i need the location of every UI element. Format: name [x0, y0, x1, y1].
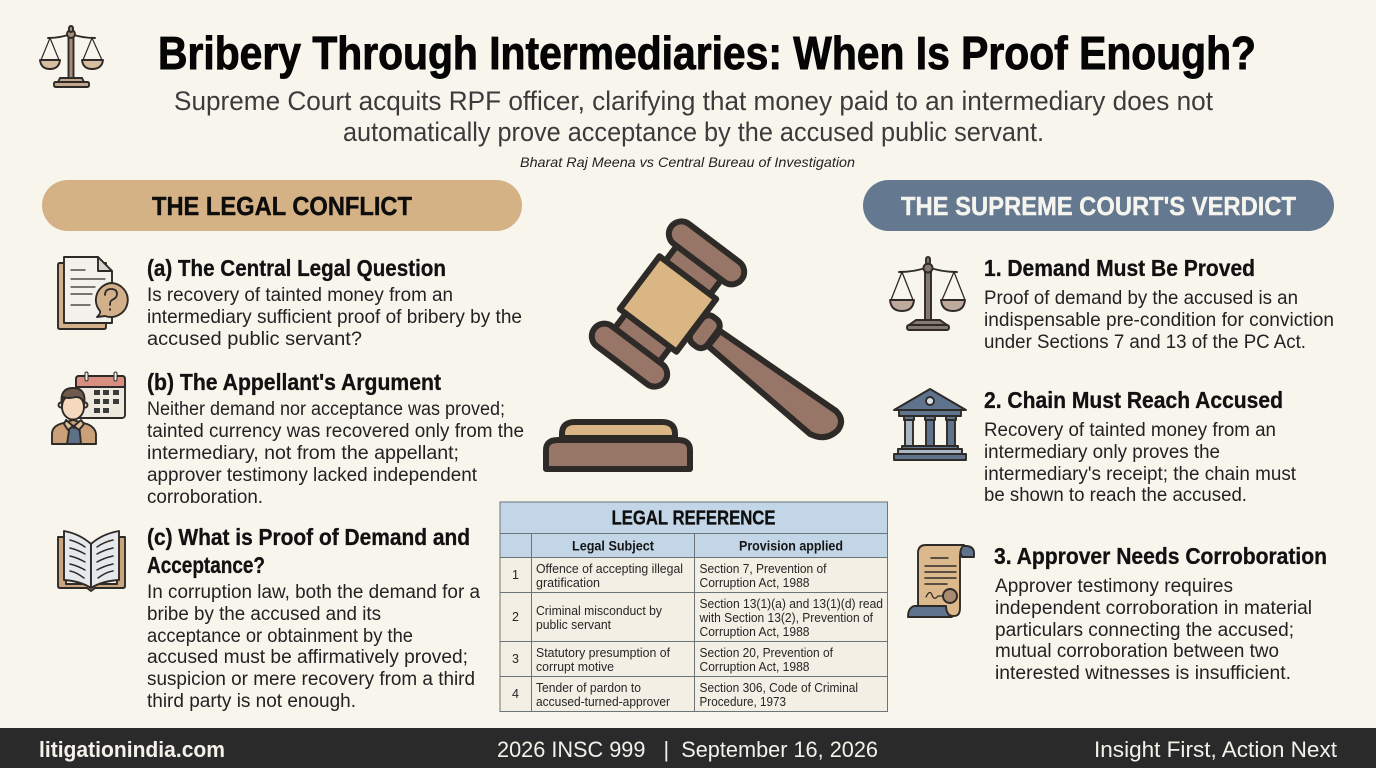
legal reference table: Provision applied — [739, 538, 843, 554]
text block: (a) central legal question: accused public servant? — [147, 329, 362, 350]
legal reference table: LEGAL REFERENCE — [612, 508, 776, 530]
text block: 2. chain must reach accused: be shown to reach the accused. — [984, 485, 1247, 506]
table row 1: 1 — [512, 568, 519, 582]
table row 2: Section 13(1)(a) and 13(1)(d) read — [700, 597, 883, 611]
table row 1 — [512, 562, 827, 590]
text block: 2. chain must reach accused: 2. Chain Must Reach Accused — [984, 387, 1283, 413]
text block: (b) appellant's argument: approver testimony lacked independent — [147, 465, 478, 486]
icon: open book — [58, 531, 125, 591]
heading pill: the legal conflict — [42, 180, 522, 231]
text block: 1. demand must be proved: indispensable pre-condition for conviction — [984, 310, 1334, 331]
table row 3 — [512, 646, 833, 674]
text block: 1. demand must be proved — [984, 255, 1334, 353]
icon: header scales — [40, 26, 103, 87]
heading pill: the supreme court's verdict — [863, 180, 1334, 231]
subtitle: Supreme Court acquits RPF officer, clarifying that money paid to an intermediary does not — [174, 86, 1214, 116]
text block: (b) appellant's argument: Neither demand nor acceptance was proved; — [147, 399, 505, 420]
table row 1: Corruption Act, 1988 — [700, 576, 810, 590]
text block: 1. demand must be proved: Proof of demand by the accused is an — [984, 288, 1298, 309]
icon: document with question bubble — [58, 257, 128, 329]
text block: (c) proof of demand and acceptance: acceptance or obtainment by the — [147, 626, 413, 647]
table row 3: Statutory presumption of — [536, 646, 671, 660]
text block: 2. chain must reach accused: Recovery of tainted money from an — [984, 420, 1276, 441]
text block: 2. chain must reach accused: intermediary's receipt; the chain must — [984, 464, 1297, 485]
table row 3: Section 20, Prevention of — [700, 646, 833, 660]
footer bar: Insight First, Action Next — [1094, 737, 1337, 762]
text block: 1. demand must be proved: 1. Demand Must Be Proved — [984, 255, 1255, 281]
subtitle: automatically prove acceptance by the accused public servant. — [343, 117, 1044, 147]
text block: (b) appellant's argument: tainted currency was recovered only from the — [147, 421, 524, 442]
text block: 3. approver needs corroboration: independent corroboration in material — [995, 598, 1312, 619]
table row 4 — [512, 681, 858, 709]
text block: (b) appellant's argument — [147, 369, 524, 508]
heading pill: the legal conflict: THE LEGAL CONFLICT — [152, 191, 412, 221]
legal reference table — [500, 502, 888, 712]
text block: 2. chain must reach accused — [984, 387, 1297, 506]
table row 4: Procedure, 1973 — [700, 695, 786, 709]
table row 3: Corruption Act, 1988 — [700, 660, 810, 674]
legal reference table: Legal Subject — [572, 538, 654, 554]
footer bar — [0, 728, 1376, 768]
table row 2 — [512, 597, 883, 639]
table row 4: 4 — [512, 687, 519, 701]
table row 2: Corruption Act, 1988 — [700, 625, 810, 639]
text block: (b) appellant's argument: (b) The Appellant's Argument — [147, 369, 441, 395]
text block: (c) proof of demand and acceptance: In corruption law, both the demand for a — [147, 582, 480, 603]
text block: (c) proof of demand and acceptance: suspicion or mere recovery from a third — [147, 669, 475, 690]
icon: gavel — [546, 216, 841, 469]
case name: Bharat Raj Meena vs Central Bureau of Investigation — [520, 154, 855, 170]
icon: scroll with seal — [908, 545, 974, 617]
footer bar: litigationindia.com — [39, 737, 225, 762]
table row 3: corrupt motive — [536, 660, 614, 674]
text block: (c) proof of demand and acceptance: accused must be affirmatively proved; — [147, 647, 468, 668]
text block: 3. approver needs corroboration: particulars connecting the accused; — [995, 620, 1294, 641]
table row 1: Section 7, Prevention of — [700, 562, 827, 576]
text block: 1. demand must be proved: under Sections 7 and 13 of the PC Act. — [984, 332, 1306, 353]
table row 4: accused-turned-approver — [536, 695, 670, 709]
subtitle — [174, 86, 1214, 147]
title: Bribery Through Intermediaries: When Is Proof Enough? — [158, 27, 1256, 79]
table row 2: with Section 13(2), Prevention of — [699, 611, 874, 625]
heading pill: the supreme court's verdict: THE SUPREME COURT'S VERDICT — [901, 191, 1296, 221]
text block: (a) central legal question — [147, 255, 522, 350]
text block: (b) appellant's argument: intermediary, not from the appellant; — [147, 443, 459, 464]
text block: 3. approver needs corroboration: Approver testimony requires — [995, 576, 1233, 597]
text block: (c) proof of demand and acceptance: third party is not enough. — [147, 691, 356, 712]
text block: (c) proof of demand and acceptance: Acceptance? — [147, 552, 265, 578]
table row 2: public servant — [536, 618, 612, 632]
icon: verdict scales — [890, 257, 965, 330]
text block: (b) appellant's argument: corroboration. — [147, 487, 263, 508]
text block: (c) proof of demand and acceptance: (c) What is Proof of Demand and — [147, 524, 470, 550]
table row 2: Criminal misconduct by — [536, 604, 663, 618]
icon: court building — [894, 389, 966, 460]
footer bar: 2026 INSC 999 | September 16, 2026 — [497, 737, 878, 762]
text block: 3. approver needs corroboration: mutual corroboration between two — [995, 641, 1279, 662]
table row 1: Offence of accepting illegal — [536, 562, 683, 576]
table row 1: gratification — [536, 576, 600, 590]
text block: 3. approver needs corroboration: 3. Approver Needs Corroboration — [994, 543, 1327, 569]
text block: (c) proof of demand and acceptance: bribe by the accused and its — [147, 604, 381, 625]
text block: 2. chain must reach accused: intermediary only proves the — [984, 442, 1220, 463]
text block: (a) central legal question: intermediary sufficient proof of bribery by the — [147, 307, 522, 328]
text block: (a) central legal question: (a) The Central Legal Question — [147, 255, 446, 281]
text block: 3. approver needs corroboration: interested witnesses is insufficient. — [995, 663, 1291, 684]
table row 3: 3 — [512, 652, 519, 666]
text block: (a) central legal question: Is recovery of tainted money from an — [147, 285, 453, 306]
icon: person with calendar — [52, 372, 125, 444]
table row 2: 2 — [512, 610, 519, 624]
table row 4: Section 306, Code of Criminal — [700, 681, 858, 695]
text block: 3. approver needs corroboration — [994, 543, 1327, 684]
text block: (c) proof of demand and acceptance — [147, 524, 480, 712]
table row 4: Tender of pardon to — [536, 681, 641, 695]
